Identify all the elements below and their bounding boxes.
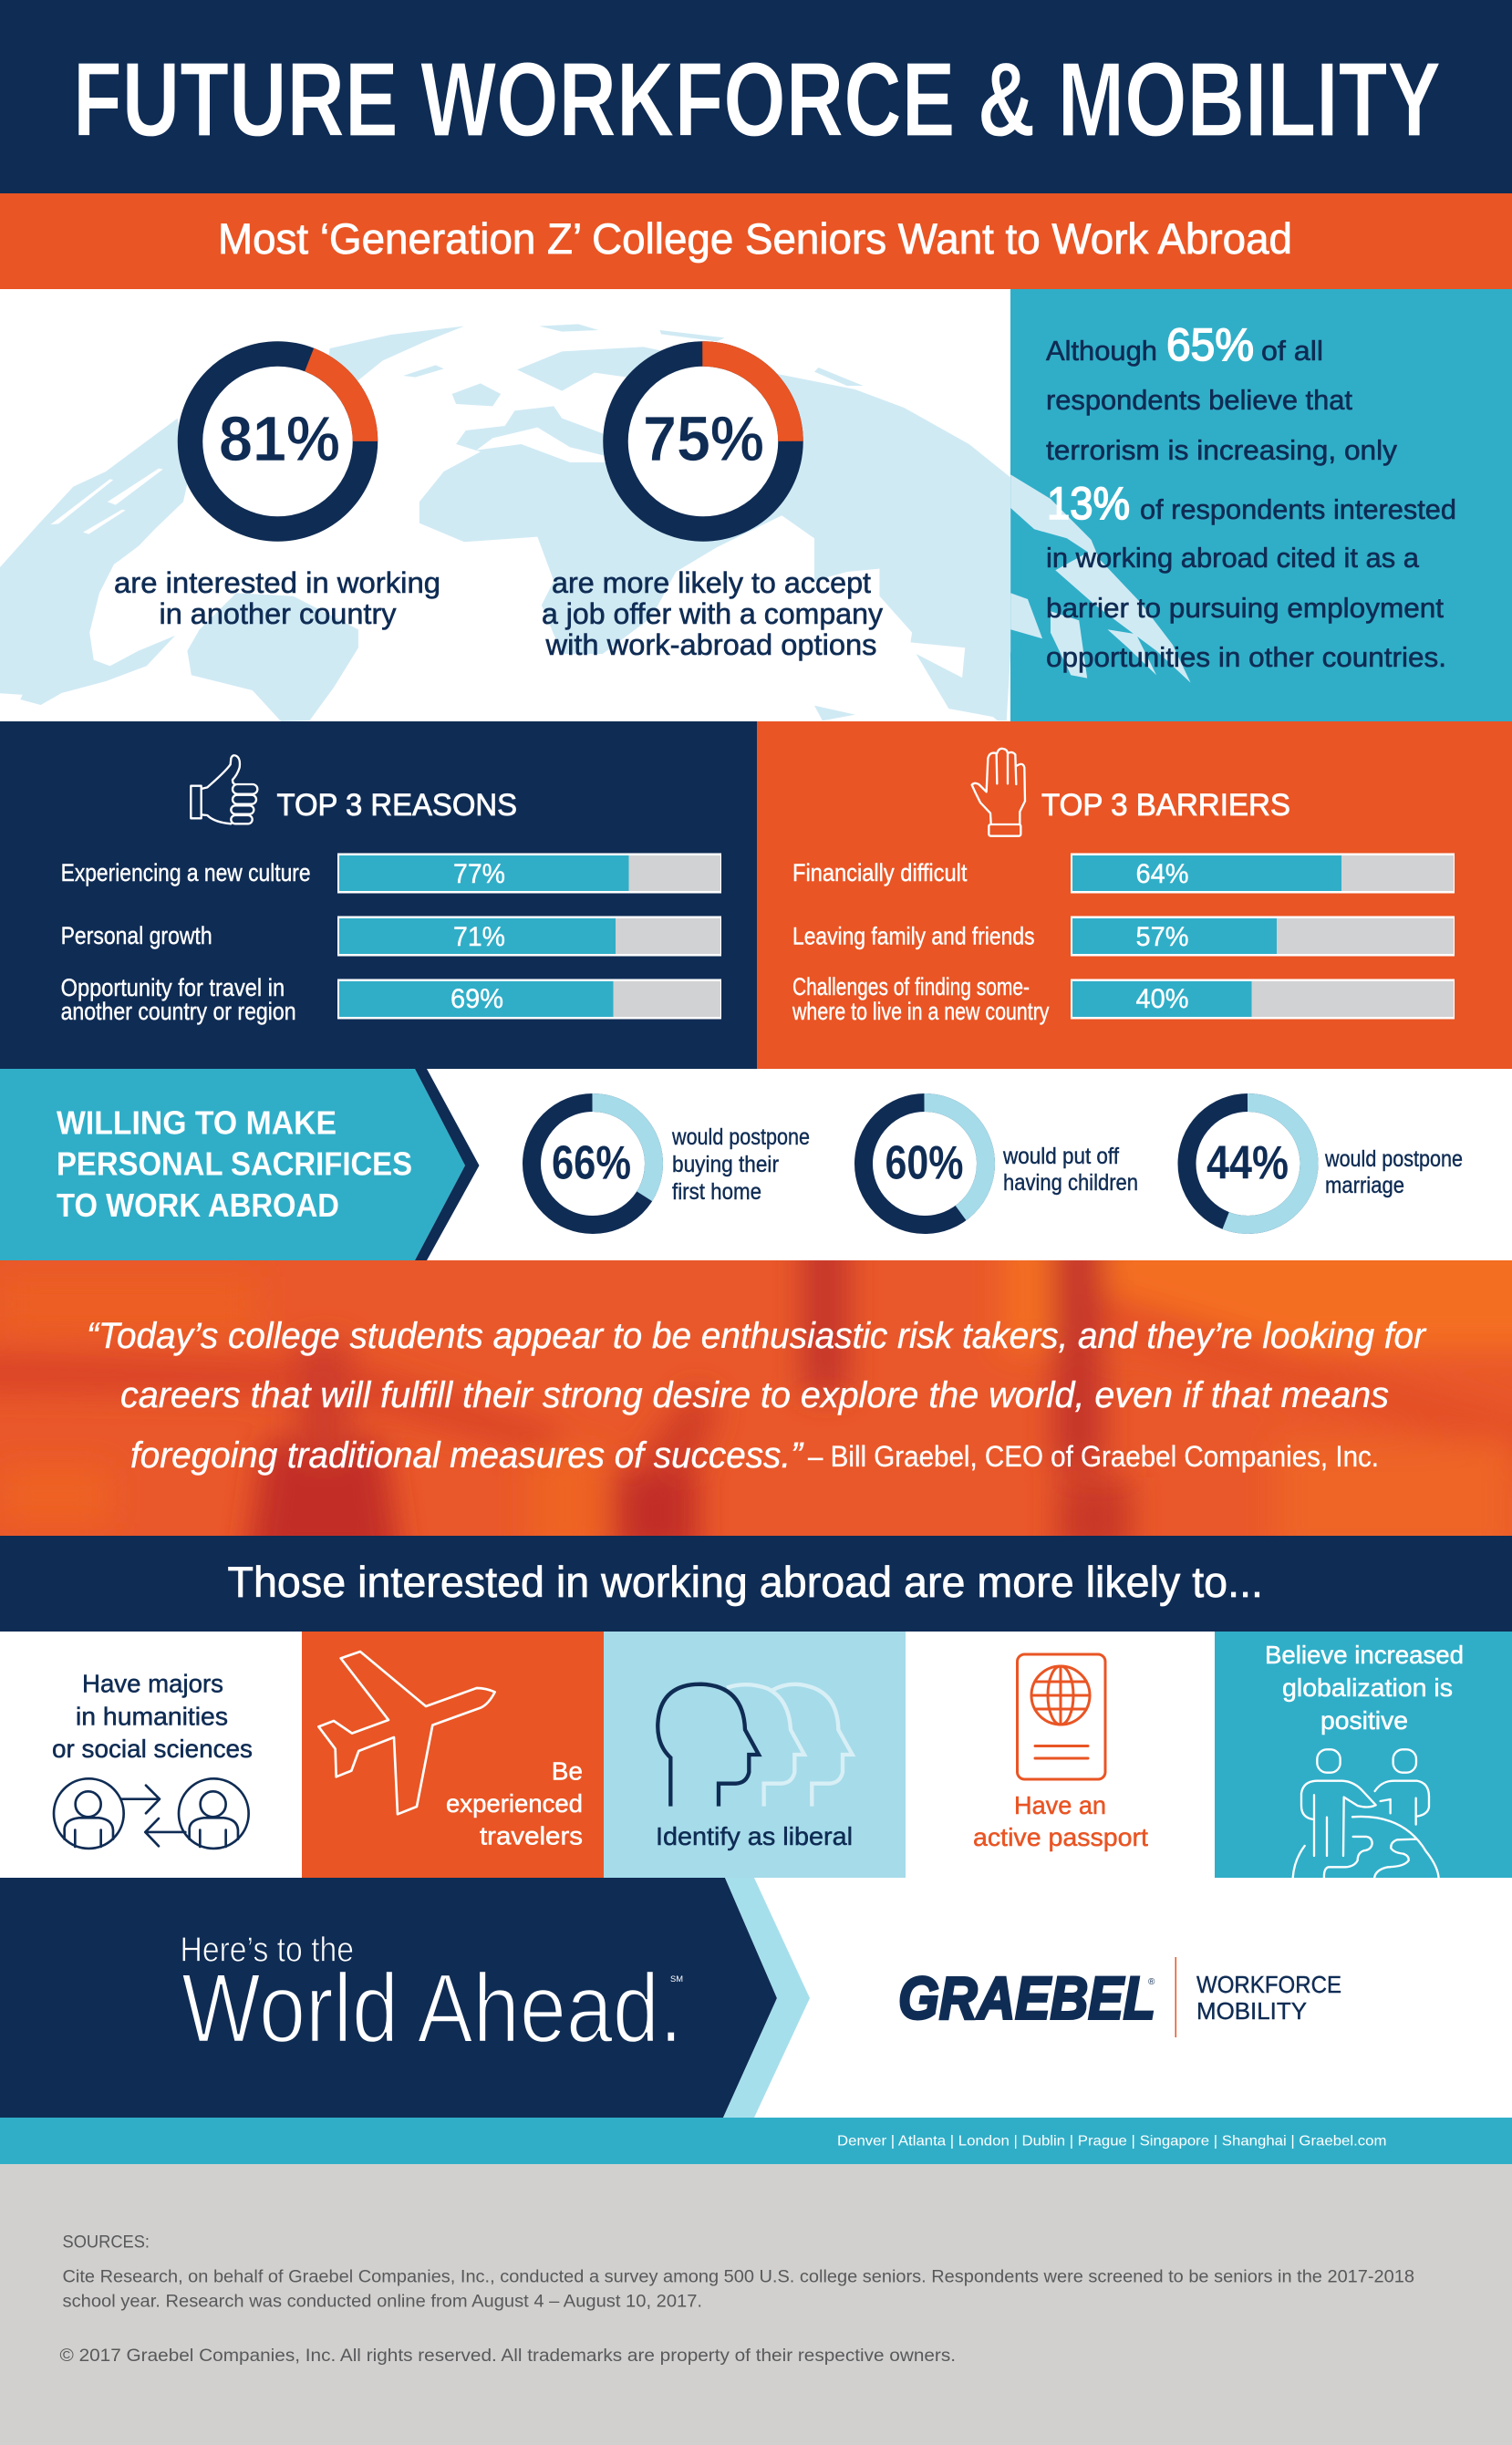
card: experienced travelers: travelers xyxy=(480,1822,583,1849)
title band xyxy=(0,0,1512,193)
bar: financially difficult 64% xyxy=(792,854,1455,894)
band: those interested in working abroad: Those interested in working abroad are more likely to... xyxy=(228,1558,1263,1606)
caption: 60%: having children xyxy=(1003,1170,1138,1196)
side panel text: terrorism is increasing, only xyxy=(1046,434,1397,466)
teal side panel background xyxy=(1010,289,1512,721)
quote text xyxy=(87,1316,1427,1476)
caption: 75%: with work-abroad options xyxy=(544,628,877,661)
logo: graebel workforce mobility: GRAEBEL xyxy=(898,1964,1155,2032)
quote text: careers that will fulfill their strong desire to explore the world, even if that means xyxy=(120,1375,1389,1415)
card: experienced travelers: experienced xyxy=(446,1789,583,1818)
card: active passport: active passport xyxy=(973,1823,1148,1851)
side panel text xyxy=(1046,319,1456,673)
panel: quote xyxy=(0,1260,1512,1536)
quote text: foregoing traditional measures of success.” xyxy=(130,1435,804,1476)
caption: 81% xyxy=(114,566,440,630)
panel: sources: Cite Research, on behalf of Graebel Companies, Inc., conducted a survey among 500 U.S. college seniors. Respondents were screened to be seniors in the 2017-2018 xyxy=(62,2267,1414,2287)
bar: challenges of finding somewhere to live 40%: Challenges of finding some- xyxy=(792,973,1030,1000)
bar: financially difficult 64%: Financially difficult xyxy=(792,859,968,886)
icon: people exchange xyxy=(54,1778,249,1849)
quote attribution: – Bill Graebel, CEO of Graebel Companies, Inc. xyxy=(808,1440,1379,1473)
heading: willing to make personal sacrifices xyxy=(57,1103,412,1224)
map fragments over teal panel xyxy=(1010,474,1191,683)
heading: willing to make personal sacrifices: TO WORK ABROAD xyxy=(57,1186,339,1224)
bar: financially difficult 64%: 64% xyxy=(1136,859,1189,889)
caption: 75%: a job offer with a company xyxy=(542,597,883,630)
caption: 66%: buying their xyxy=(672,1152,779,1177)
bar: experiencing a new culture 77%: 77% xyxy=(453,859,505,889)
side panel text: 13% xyxy=(1047,478,1130,529)
caption: 66%: first home xyxy=(672,1179,761,1205)
caption: 66%: would postpone xyxy=(671,1124,810,1150)
band: those interested in working abroad xyxy=(0,1536,1512,1632)
caption: 81%: are interested in working xyxy=(114,566,440,599)
donut chart: 66%: 66% xyxy=(552,1136,631,1189)
teal strip: office locations xyxy=(0,2118,1512,2164)
tagline: SM xyxy=(670,1974,683,1984)
map sea cut-outs xyxy=(50,428,998,720)
icon: passport xyxy=(1018,1654,1105,1779)
map fragments bottom right xyxy=(917,654,998,718)
bar: opportunity for travel 69%: another country or region xyxy=(61,998,296,1025)
logo: graebel workforce mobility: ® xyxy=(1148,1977,1155,1987)
side panel text: opportunities in other countries. xyxy=(1046,641,1446,673)
donut chart: 75%: 75% xyxy=(643,403,764,474)
caption: 75% xyxy=(542,566,883,661)
card: majors in humanities xyxy=(0,1632,302,1878)
donut chart: 44% xyxy=(1187,1103,1310,1225)
card: globalization is positive: positive xyxy=(1320,1706,1408,1735)
side panel text: of all xyxy=(1261,335,1323,367)
bar: challenges of finding somewhere to live 40%: where to live in a new country xyxy=(792,998,1050,1025)
bar: experiencing a new culture 77%: Experiencing a new culture xyxy=(61,859,311,886)
panel: sources: © 2017 Graebel Companies, Inc. All rights reserved. All trademarks are property of their respective owners. xyxy=(60,2347,956,2366)
bar: personal growth 71%: 71% xyxy=(453,922,505,952)
bar: experiencing a new culture 77% xyxy=(61,854,721,894)
icon: thumbs up xyxy=(191,755,257,824)
caption: 66% xyxy=(671,1124,810,1205)
arrow banner xyxy=(0,1069,480,1260)
card: active passport xyxy=(906,1632,1215,1878)
panel: here's to the world ahead xyxy=(0,1878,1512,2118)
side panel text: in working abroad cited it as a xyxy=(1046,542,1420,574)
panel: generation z statistics xyxy=(0,289,1512,721)
card: globalization is positive: globalization is xyxy=(1282,1673,1453,1702)
world map background xyxy=(0,324,1010,721)
card: majors in humanities: in humanities xyxy=(76,1702,228,1731)
card: identify as liberal xyxy=(604,1632,906,1878)
bar: leaving family and friends 57%: 57% xyxy=(1136,922,1189,952)
tagline: World Ahead. xyxy=(181,1953,682,2063)
caption: 75%: are more likely to accept xyxy=(552,566,871,599)
donut chart: 44%: 44% xyxy=(1206,1136,1289,1189)
side panel text: respondents believe that xyxy=(1046,384,1352,416)
card: majors in humanities: or social sciences xyxy=(52,1735,253,1763)
card: experienced travelers xyxy=(302,1632,604,1878)
logo: graebel workforce mobility: WORKFORCE xyxy=(1196,1971,1341,1998)
arrow banner xyxy=(0,1878,810,2118)
logo: graebel workforce mobility xyxy=(898,1957,1341,2037)
bar: personal growth 71%: Personal growth xyxy=(61,922,212,949)
bar: leaving family and friends 57%: Leaving family and friends xyxy=(792,923,1034,950)
heading: top 3 barriers: TOP 3 BARRIERS xyxy=(1041,788,1290,823)
bar: challenges of finding somewhere to live 40% xyxy=(792,973,1455,1025)
donut chart: 66% xyxy=(532,1103,654,1225)
donut chart: 75% xyxy=(616,354,791,529)
heading: willing to make personal sacrifices: WILLING TO MAKE xyxy=(57,1103,337,1142)
blurred photo background xyxy=(0,1260,1512,1536)
card: active passport: Have an xyxy=(1014,1791,1106,1819)
donut chart: 81%: 81% xyxy=(219,403,340,474)
caption: 60%: would put off xyxy=(1002,1144,1119,1169)
icon: heads xyxy=(658,1684,853,1807)
donut chart: 81% xyxy=(164,327,391,555)
card: majors in humanities: Have majors xyxy=(82,1669,223,1698)
icon: people with globe xyxy=(1293,1749,1439,1879)
heading: willing to make personal sacrifices: PERSONAL SACRIFICES xyxy=(57,1145,412,1182)
side panel text: barrier to pursuing employment xyxy=(1046,592,1444,624)
panel: top 3 reasons xyxy=(0,721,757,1069)
bar: personal growth 71% xyxy=(61,916,721,956)
panel: sources xyxy=(0,2164,1512,2445)
panel: top 3 barriers xyxy=(757,721,1512,1069)
card: globalization is positive xyxy=(1215,1632,1512,1879)
subtitle band: Most ‘Generation Z’ College Seniors Want to Work Abroad xyxy=(218,214,1292,263)
logo: graebel workforce mobility: MOBILITY xyxy=(1196,1997,1307,2025)
icon: raised hand xyxy=(972,749,1025,836)
bar: opportunity for travel 69% xyxy=(61,974,721,1025)
bar: leaving family and friends 57% xyxy=(792,916,1455,956)
subtitle band xyxy=(0,193,1512,289)
side panel text: 65% xyxy=(1166,319,1254,370)
card: identify as liberal: Identify as liberal xyxy=(656,1822,853,1850)
teal strip: office locations: Denver | Atlanta | London | Dublin | Prague | Singapore | Shanghai | Graebel.com xyxy=(837,2134,1386,2149)
card: globalization is positive: Believe increased xyxy=(1265,1641,1464,1669)
panel: sources: school year. Research was conducted online from August 4 – August 10, 2017. xyxy=(62,2293,702,2311)
donut chart: 60% xyxy=(864,1103,986,1225)
caption: 60% xyxy=(1002,1144,1138,1196)
side panel text: Although xyxy=(1046,335,1157,367)
caption: 81%: in another country xyxy=(159,597,396,630)
tagline: Here’s to the xyxy=(181,1932,354,1970)
panel: personal sacrifices xyxy=(0,1069,1512,1260)
icon: airplane xyxy=(318,1652,495,1814)
panel: sources: SOURCES: xyxy=(62,2233,150,2253)
bar: challenges of finding somewhere to live 40%: 40% xyxy=(1136,984,1189,1014)
heading: top 3 reasons: TOP 3 REASONS xyxy=(277,788,517,823)
side panel text: of respondents interested xyxy=(1140,493,1456,525)
caption: 44%: marriage xyxy=(1325,1173,1404,1198)
caption: 44% xyxy=(1324,1146,1463,1198)
bar: opportunity for travel 69%: 69% xyxy=(450,984,503,1014)
card: experienced travelers: Be xyxy=(552,1756,583,1786)
quote text: “Today’s college students appear to be enthusiastic risk takers, and they’re looking for xyxy=(87,1316,1427,1356)
bar: opportunity for travel 69%: Opportunity for travel in xyxy=(61,974,285,1001)
donut chart: 60%: 60% xyxy=(885,1136,963,1189)
caption: 44%: would postpone xyxy=(1324,1146,1463,1172)
